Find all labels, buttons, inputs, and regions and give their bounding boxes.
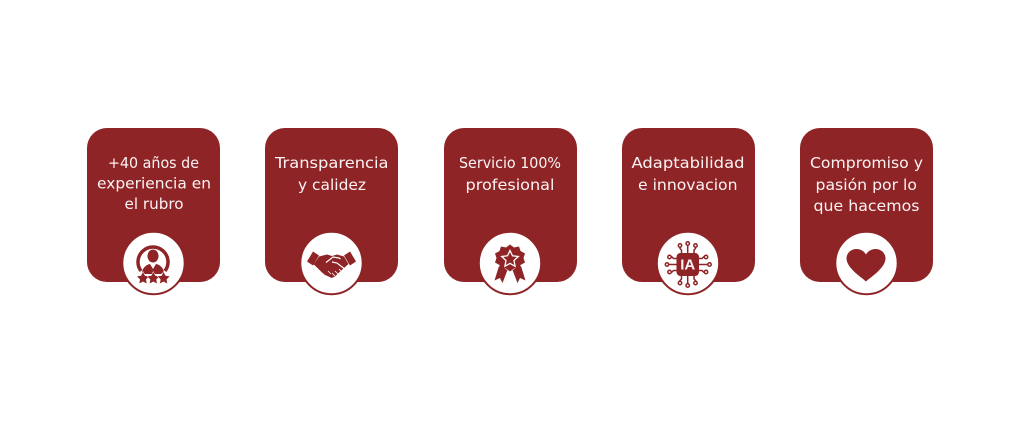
text: compromiso: Compromiso y	[810, 154, 923, 172]
text: transparencia	[274, 154, 388, 194]
text: compromiso: pasión por lo	[816, 176, 917, 194]
icon: medalla	[479, 232, 541, 294]
text: transparencia: Transparencia	[274, 154, 388, 172]
icon: persona con estrellas	[122, 232, 185, 294]
text: adaptabilidad: e innovacion	[638, 176, 738, 194]
icon: chip IA: IA	[680, 256, 695, 274]
text: servicio: profesional	[466, 176, 554, 194]
text: servicio: Servicio 100%	[459, 154, 561, 172]
panel: experiencia	[87, 128, 220, 294]
text: experiencia	[97, 154, 211, 213]
panel: compromiso	[800, 128, 933, 294]
text: compromiso: que hacemos	[814, 197, 920, 215]
text: experiencia: +40 años de	[108, 154, 199, 172]
text: adaptabilidad: Adaptabilidad	[632, 154, 744, 172]
icon: apreton de manos	[300, 232, 363, 294]
text: servicio	[459, 154, 561, 194]
text: compromiso	[810, 154, 923, 215]
text: experiencia: el rubro	[124, 195, 184, 213]
icon: corazon	[835, 232, 898, 294]
text: adaptabilidad	[632, 154, 744, 194]
panel: servicio	[444, 128, 577, 294]
text: experiencia: experiencia en	[97, 174, 211, 192]
panel: adaptabilidad	[622, 128, 755, 294]
icon: chip IA	[657, 232, 719, 294]
panel: transparencia	[265, 128, 398, 294]
text: transparencia: y calidez	[298, 176, 366, 194]
